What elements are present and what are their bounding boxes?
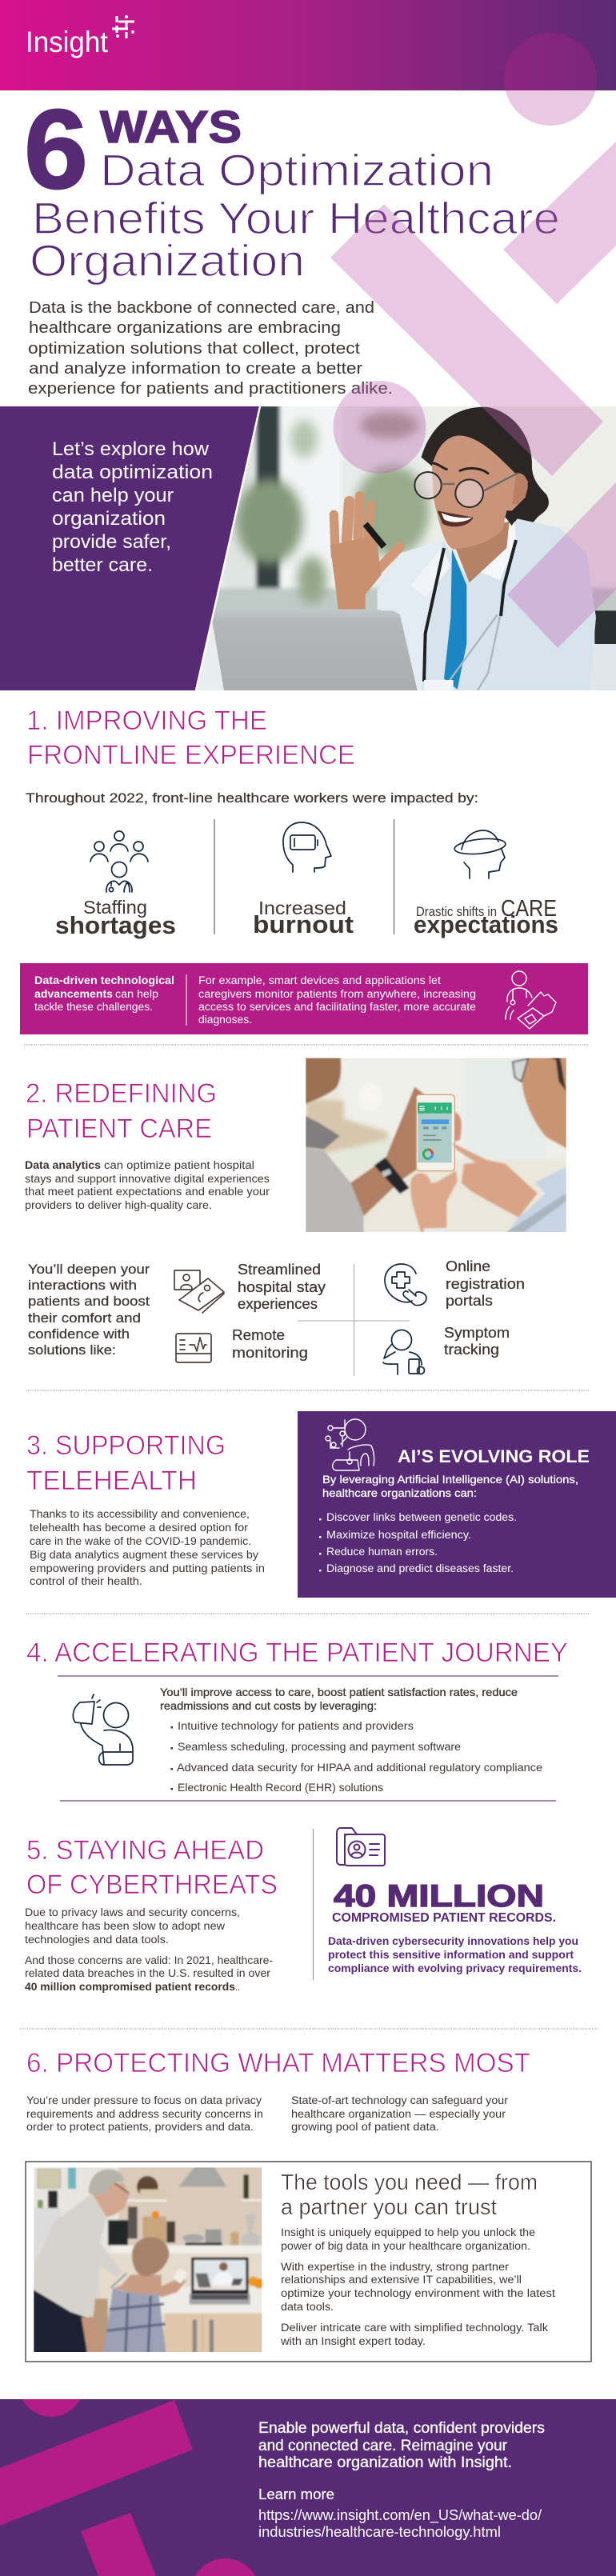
icon: staffing team bbox=[90, 831, 148, 892]
callout left text: advancements bbox=[34, 988, 113, 1000]
label: symptom tracking: Symptom bbox=[444, 1325, 510, 1341]
heading: staying ahead of cyberthreats bbox=[26, 1835, 278, 1900]
section 3 paragraph: Big data analytics augment these services by bbox=[30, 1549, 258, 1561]
left paragraph bbox=[26, 2094, 263, 2133]
footer learn more: industries/healthcare-technology.html bbox=[258, 2524, 501, 2540]
heading: improving the frontline experience: FRONTLINE EXPERIENCE bbox=[27, 740, 355, 770]
left paragraph: You’re under pressure to focus on data privacy bbox=[26, 2094, 262, 2106]
text: deepen your interactions: You’ll deepen your bbox=[28, 1262, 150, 1277]
icon: caregiver with smartwatch bbox=[506, 971, 556, 1029]
title line 3: Organization bbox=[30, 235, 305, 286]
text: deepen your interactions: confidence with bbox=[28, 1326, 130, 1342]
section 2 paragraph: Data analytics bbox=[25, 1159, 101, 1171]
callout right text bbox=[198, 974, 476, 1026]
heading: improving the frontline experience bbox=[26, 706, 355, 770]
photo: couple on telehealth video call bbox=[34, 2167, 262, 2352]
cybersecurity text: Data-driven cybersecurity innovations help you bbox=[328, 1935, 578, 1947]
panel heading: The tools you need — from bbox=[281, 2170, 538, 2194]
header band bbox=[0, 0, 616, 90]
heading: protecting what matters most: 6. PROTECTING WHAT MATTERS MOST bbox=[26, 2048, 530, 2078]
icon: patient record folder bbox=[337, 1828, 385, 1866]
prompt text: organization bbox=[52, 508, 166, 530]
intro paragraph: healthcare organizations are embracing bbox=[29, 319, 341, 337]
bullet list: Seamless scheduling, processing and payment software bbox=[178, 1741, 461, 1753]
section 2 paragraph: that meet patient expectations and enable your bbox=[25, 1186, 270, 1198]
section 2 paragraph: can optimize patient hospital bbox=[104, 1159, 254, 1171]
callout left text bbox=[34, 974, 174, 1013]
footer learn more bbox=[258, 2486, 542, 2540]
WAYS: WAYS bbox=[100, 102, 242, 153]
panel heading bbox=[281, 2170, 538, 2219]
section 3 paragraph bbox=[30, 1508, 265, 1587]
callout right text: caregivers monitor patients from anywhere, increasing bbox=[198, 988, 476, 1000]
right paragraph: growing pool of patient data. bbox=[291, 2121, 439, 2133]
heading: redefining patient care: PATIENT CARE bbox=[26, 1114, 212, 1144]
icon: clinician with circuits bbox=[326, 1419, 374, 1470]
decorative pink shapes bbox=[330, 33, 616, 648]
callout right text: For example, smart devices and applications let bbox=[198, 974, 441, 986]
label: online registration portals: portals bbox=[446, 1293, 493, 1309]
icon: hospital stay bbox=[174, 1270, 224, 1313]
logo: Insight: Insight bbox=[26, 26, 109, 58]
callout left text: tackle these challenges. bbox=[34, 1001, 153, 1013]
section 5 paragraphs: Due to privacy laws and security concerns, bbox=[25, 1906, 240, 1918]
panel bullet list: Reduce human errors. bbox=[326, 1546, 438, 1558]
cybersecurity text: protect this sensitive information and support bbox=[328, 1949, 574, 1961]
prompt text: better care. bbox=[52, 554, 153, 576]
footer call to action bbox=[258, 2420, 545, 2471]
intro paragraph: experience for patients and practitioners alike. bbox=[28, 380, 393, 398]
section 5 bbox=[25, 1828, 582, 1993]
prompt text: data optimization bbox=[52, 462, 213, 483]
text: deepen your interactions: patients and boost bbox=[28, 1294, 150, 1309]
panel intro: By leveraging Artificial Intelligence (AI) solutions, bbox=[322, 1473, 578, 1486]
label: remote monitoring: monitoring bbox=[232, 1345, 308, 1361]
panel bullet list: Diagnose and predict diseases faster. bbox=[326, 1562, 514, 1574]
panel body text: Insight is uniquely equipped to help you unlock the bbox=[281, 2226, 535, 2238]
callout left text: can help bbox=[115, 988, 158, 1000]
panel body text: power of big data in your healthcare organization. bbox=[281, 2240, 530, 2252]
intro paragraph: Data is the backbone of connected care, and bbox=[29, 299, 374, 317]
heading: accelerating the patient journey: 4. ACCELERATING THE PATIENT JOURNEY bbox=[26, 1638, 568, 1668]
panel bullet list: Maximize hospital efficiency. bbox=[326, 1529, 471, 1541]
callout right text: diagnoses. bbox=[198, 1014, 252, 1026]
panel: data-driven advancements callout bbox=[20, 963, 588, 1034]
stat: staffing shortages bbox=[55, 897, 176, 939]
footer learn more: Learn more bbox=[258, 2486, 334, 2502]
label: symptom tracking: tracking bbox=[444, 1342, 499, 1358]
heading: supporting telehealth bbox=[26, 1430, 226, 1496]
right paragraph bbox=[291, 2094, 509, 2133]
panel body text: data tools. bbox=[281, 2301, 334, 2313]
section 5 paragraphs: .. bbox=[235, 1981, 240, 1993]
section 5 paragraphs: healthcare has been slow to adopt new bbox=[25, 1920, 225, 1932]
section 6 bbox=[26, 2048, 591, 2362]
icon: head with orbit bbox=[454, 830, 506, 878]
lead-in sentence: Throughout 2022, front-line healthcare workers were impacted by: bbox=[26, 790, 478, 806]
bullet list: Intuitive technology for patients and providers bbox=[178, 1720, 414, 1732]
stat: increased burnout bbox=[253, 898, 354, 938]
photo: hands holding health app on phone bbox=[306, 1058, 566, 1232]
panel body text: relationships and extensive IT capabilities, we’ll bbox=[281, 2274, 522, 2286]
panel heading: a partner you can trust bbox=[281, 2194, 497, 2219]
footer panel bbox=[0, 2399, 616, 2576]
panel intro bbox=[322, 1473, 578, 1499]
section 4 bbox=[26, 1638, 568, 1801]
cybersecurity text bbox=[328, 1935, 582, 1974]
right paragraph: State-of-art technology can safeguard your bbox=[291, 2094, 509, 2106]
logo: Insight bbox=[26, 15, 134, 58]
bullet list: Advanced data security for HIPAA and additional regulatory compliance bbox=[177, 1762, 542, 1774]
panel bullet list bbox=[319, 1511, 517, 1574]
panel: partner you can trust bbox=[26, 2160, 591, 2362]
panel heading: AI’S EVOLVING ROLE bbox=[398, 1446, 590, 1466]
section 3 bbox=[26, 1411, 616, 1598]
stat caption: COMPROMISED PATIENT RECORDS. bbox=[332, 1911, 556, 1925]
stat: staffing shortages: Staffing bbox=[83, 897, 147, 918]
woman bbox=[422, 407, 549, 538]
panel body text: optimize your technology environment with the latest bbox=[281, 2287, 555, 2299]
heading: staying ahead of cyberthreats: 5. STAYING AHEAD bbox=[26, 1835, 264, 1866]
stat: drastic shifts in care expectations bbox=[414, 896, 558, 938]
text: deepen your interactions: their comfort and bbox=[28, 1310, 141, 1326]
hand bbox=[334, 496, 400, 574]
title bbox=[24, 86, 560, 286]
intro paragraph: optimization solutions that collect, protect bbox=[28, 340, 360, 358]
bullet list bbox=[171, 1720, 542, 1794]
section 2 paragraph: providers to deliver high-quality care. bbox=[25, 1199, 212, 1211]
section 2 paragraph: stays and support innovative digital experiences bbox=[25, 1173, 270, 1185]
section 2 bbox=[25, 1052, 572, 1376]
heading: improving the frontline experience: 1. IMPROVING THE bbox=[26, 706, 267, 736]
label: online registration portals: Online bbox=[446, 1258, 490, 1274]
icon: patient using phone bbox=[73, 1694, 133, 1765]
panel body text: Deliver intricate care with simplified technology. Talk bbox=[281, 2322, 548, 2334]
label: online registration portals bbox=[446, 1258, 525, 1309]
section 3 paragraph: control of their health. bbox=[30, 1575, 142, 1587]
section 3 paragraph: empowering providers and putting patients in bbox=[30, 1562, 265, 1574]
callout right text: access to services and facilitating faster, more accurate bbox=[198, 1001, 476, 1013]
bullet list: Electronic Health Record (EHR) solutions bbox=[178, 1782, 383, 1794]
left paragraph: requirements and address security concerns in bbox=[26, 2108, 263, 2120]
hero photo: doctor waving at laptop bbox=[194, 404, 616, 692]
label: streamlined hospital stay experiences: Streamlined bbox=[238, 1262, 321, 1278]
title line 1: Data Optimization bbox=[100, 145, 494, 195]
stat: drastic shifts in care expectations: CARE bbox=[501, 896, 557, 922]
stat: increased burnout: burnout bbox=[253, 910, 354, 938]
panel intro: healthcare organizations can: bbox=[322, 1486, 477, 1499]
heading: supporting telehealth: 3. SUPPORTING bbox=[26, 1430, 226, 1461]
stat: staffing shortages: shortages bbox=[55, 911, 176, 939]
panel: purple prompt bbox=[0, 406, 260, 690]
stat: increased burnout: Increased bbox=[258, 898, 346, 918]
text: improve access to care bbox=[160, 1686, 518, 1712]
panel bullet list: Discover links between genetic codes. bbox=[326, 1511, 517, 1523]
section 5 paragraphs bbox=[25, 1906, 273, 1993]
right paragraph: healthcare organization — especially your bbox=[291, 2108, 506, 2120]
label: online registration portals: registration bbox=[446, 1276, 525, 1292]
section 5 paragraphs: related data breaches in the U.S. resulted in over bbox=[25, 1967, 271, 1979]
label: remote monitoring: Remote bbox=[232, 1327, 285, 1343]
callout left text: Data-driven technological bbox=[34, 974, 174, 986]
prompt text: provide safer, bbox=[52, 531, 171, 553]
icon: remote monitoring bbox=[176, 1334, 211, 1362]
footer learn more: https://www.insight.com/en_US/what-we-do/ bbox=[258, 2507, 542, 2524]
footer call to action: healthcare organization with Insight. bbox=[258, 2454, 512, 2471]
numeral 6: 6 bbox=[24, 86, 88, 212]
panel body text bbox=[280, 2226, 555, 2347]
label: streamlined hospital stay experiences: experiences bbox=[238, 1296, 318, 1312]
text: improve access to care: readmissions and cut costs by leveraging: bbox=[160, 1699, 377, 1712]
stat: 40 million: 40 MILLION bbox=[334, 1879, 544, 1914]
heading: supporting telehealth: TELEHEALTH bbox=[26, 1466, 197, 1496]
section 5 paragraphs: technologies and data tools. bbox=[25, 1934, 169, 1946]
section 5 paragraphs: And those concerns are valid: In 2021, healthcare- bbox=[25, 1954, 273, 1966]
footer call to action: Enable powerful data, confident providers bbox=[258, 2420, 545, 2437]
intro paragraph: and analyze information to create a better bbox=[29, 360, 362, 378]
title line 2: Benefits Your Healthcare bbox=[32, 193, 560, 243]
stat: drastic shifts in care expectations: expectations bbox=[414, 910, 558, 938]
text: deepen your interactions bbox=[28, 1262, 150, 1358]
text: improve access to care: You’ll improve access to care, boost patient satisfaction rates, reduce bbox=[160, 1686, 518, 1698]
section 3 paragraph: Thanks to its accessibility and convenience, bbox=[30, 1508, 250, 1520]
intro paragraph bbox=[28, 299, 393, 398]
prompt text bbox=[52, 438, 213, 576]
icon: online registration bbox=[385, 1264, 426, 1306]
label: symptom tracking bbox=[444, 1325, 510, 1358]
laptop bbox=[210, 610, 418, 690]
prompt text: can help your bbox=[52, 485, 174, 506]
label: streamlined hospital stay experiences bbox=[238, 1262, 326, 1312]
icon: symptom tracking bbox=[383, 1330, 424, 1374]
panel body text: with an Insight expert today. bbox=[280, 2335, 426, 2347]
section 5 paragraphs: 40 million compromised patient records bbox=[25, 1981, 235, 1993]
cybersecurity text: compliance with evolving privacy requirements. bbox=[328, 1962, 582, 1974]
stat: drastic shifts in care expectations: Drastic shifts in bbox=[416, 904, 497, 919]
section 3 paragraph: care in the wake of the COVID-19 pandemic. bbox=[30, 1535, 251, 1547]
heading: staying ahead of cyberthreats: OF CYBERTHREATS bbox=[26, 1870, 278, 1900]
section 1 bbox=[20, 706, 588, 1034]
panel body text: With expertise in the industry, strong partner bbox=[281, 2261, 510, 2273]
heading: redefining patient care bbox=[26, 1078, 217, 1144]
prompt text: Let’s explore how bbox=[52, 438, 210, 460]
icon: burnout head with low battery bbox=[283, 822, 331, 872]
section 2 paragraph bbox=[25, 1159, 270, 1211]
heading: redefining patient care: 2. REDEFINING bbox=[26, 1078, 217, 1109]
footer shapes bbox=[0, 2399, 255, 2576]
section 3 paragraph: telehealth has become a desired option for bbox=[30, 1522, 249, 1534]
label: remote monitoring bbox=[232, 1327, 308, 1361]
left paragraph: order to protect patients, providers and data. bbox=[26, 2121, 254, 2133]
label: streamlined hospital stay experiences: hospital stay bbox=[238, 1279, 326, 1295]
panel: AI's evolving role bbox=[298, 1411, 616, 1598]
text: deepen your interactions: solutions like: bbox=[28, 1342, 116, 1358]
text: deepen your interactions: interactions with bbox=[28, 1278, 137, 1293]
stethoscope bbox=[424, 540, 516, 682]
footer call to action: and connected care. Reimagine your bbox=[258, 2438, 508, 2454]
